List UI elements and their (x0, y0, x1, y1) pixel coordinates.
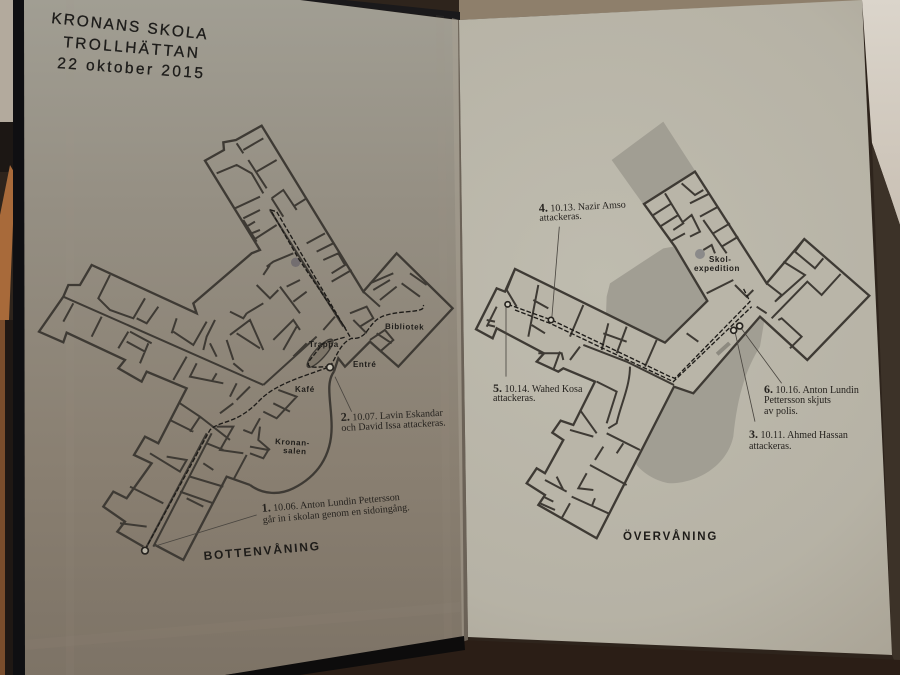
room labels: bottom floor: Bibliotek (385, 322, 424, 332)
callout 6: Pettersson skjuts (764, 395, 831, 406)
Kronansalen curve (250, 372, 334, 493)
floor plan: upper floor (476, 122, 869, 538)
room labels: bottom floor: Trappa (309, 340, 339, 349)
route (508, 288, 752, 382)
room labels: bottom floor: Entré (353, 360, 376, 369)
room label: skolexpedition: expedition (694, 264, 740, 273)
leader lines (153, 377, 352, 547)
title (51, 10, 208, 82)
upper floor fill and outer walls (476, 172, 869, 538)
callout 6 (764, 382, 859, 417)
callout 3: attackeras. (749, 441, 791, 452)
callout 2 (340, 405, 446, 434)
callout 1 (261, 488, 410, 526)
callout 6: 6. 10.16. Anton Lundin (764, 382, 859, 396)
title: 22 oktober 2015 (57, 55, 204, 82)
markers (505, 302, 743, 333)
panel: left page (24, 0, 468, 675)
room label: skolexpedition (694, 255, 740, 273)
callout 5: 5. 10.14. Wahed Kosa (493, 381, 583, 395)
callout 2: 2. 10.07. Lavin Eskandar (340, 405, 444, 424)
elevator mark (291, 258, 300, 267)
leader lines (506, 227, 782, 422)
callout 4: 4. 10.13. Nazir Amso (538, 196, 626, 215)
heading: bottenvåning: BOTTENVÅNING (203, 538, 321, 563)
callout 4 (538, 196, 627, 224)
callout 6: av polis. (764, 406, 798, 417)
callout 1: går in i skolan genom en sidoingång. (262, 502, 410, 526)
room labels: bottom floor: Kronan- (275, 437, 310, 448)
title: TROLLHÄTTAN (63, 34, 199, 62)
outer walls (39, 126, 453, 547)
interior room walls (63, 138, 427, 527)
route (145, 210, 424, 550)
corridor walls (147, 210, 343, 547)
callout 2: och David Issa attackeras. (341, 418, 446, 434)
room label: skolexpedition: Skol- (709, 255, 732, 264)
room labels: bottom floor: salen (283, 446, 307, 456)
callout 5 (493, 381, 583, 404)
ground floor silhouette (603, 122, 770, 483)
heading: övervåning: ÖVERVÅNING (623, 530, 718, 543)
panel: right page (459, 0, 892, 655)
south wing walls (155, 477, 250, 560)
callout 4: attackeras. (539, 211, 582, 224)
callout 3 (749, 427, 848, 452)
room labels: bottom floor: Kafé (295, 385, 315, 394)
callout 1: 1. 10.06. Anton Lundin Pettersson (261, 489, 400, 515)
stair marker (716, 342, 731, 356)
title: KRONANS SKOLA (51, 10, 208, 43)
callout 3: 3. 10.11. Ahmed Hassan (749, 427, 848, 441)
stairwell (304, 336, 336, 371)
interior room walls (487, 183, 841, 518)
room labels: bottom floor (275, 322, 424, 456)
callout 5: attackeras. (493, 393, 535, 404)
elevator mark (695, 249, 705, 259)
floor plan: bottom floor (39, 126, 453, 560)
marker 2 (327, 364, 333, 371)
marker 1 (142, 547, 148, 554)
